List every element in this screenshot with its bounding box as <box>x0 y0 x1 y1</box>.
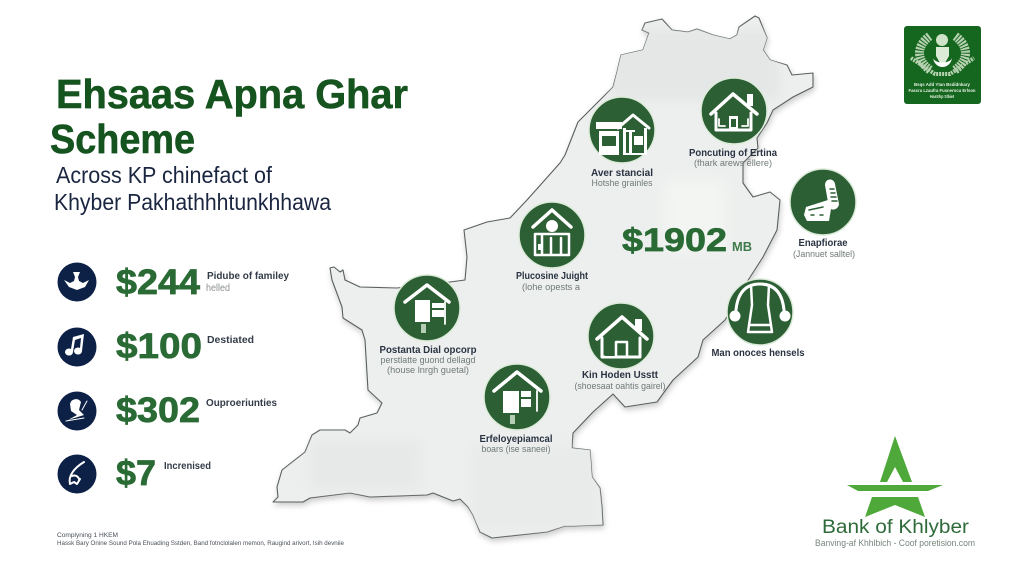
location: Aver stancial: Aver stancial <box>591 168 653 179</box>
stat: $302: $302 <box>116 391 200 430</box>
location: Postanta Dial opcorp: Postanta Dial opcorp <box>380 345 476 356</box>
location: Erfeloyepiamcal: Erfeloyepiamcal <box>480 434 553 445</box>
stat: $244 <box>58 262 289 302</box>
callout: $1902 MB <box>622 222 752 258</box>
location: Enapfiorae: Enapfiorae <box>798 238 848 249</box>
stat: $244: helled <box>206 283 230 294</box>
stat: $7: Increnised <box>164 461 211 472</box>
location: Man onoces hensels <box>712 279 805 359</box>
logo: emblem badge: Hastrhp Slbiet <box>930 94 954 99</box>
callout: $1902 MB: MB <box>732 239 752 254</box>
footnote: Hassk Bary Onine Sound Pola Ehuading Sstden, Band fotnclolalen memon, Raugind arivort, Isih devniie <box>57 540 344 547</box>
stat: $244: Pidube of familey <box>207 271 289 282</box>
location: Poncuting of Ertina <box>689 78 777 169</box>
title: Ehsaas Apna Ghar <box>56 71 408 117</box>
location: Kin Hoden Usstt <box>574 303 666 392</box>
stat: $302: Ouproeriunties <box>206 398 277 409</box>
subtitle: Across KP chinefact of <box>56 162 273 188</box>
title <box>50 71 408 162</box>
subtitle: Khyber Pakhathhhtunkhhawa <box>54 189 331 215</box>
location: Aver stancial: Hotshe grainles <box>592 178 653 189</box>
footnote <box>57 532 344 547</box>
stat: $302 <box>58 391 277 430</box>
stat: $7: $7 <box>116 454 156 493</box>
stat: $100: Destiated <box>207 335 254 346</box>
logo: emblem badge: Bsqs Add Ytan Bsdidnkary <box>914 82 970 87</box>
location: Postanta Dial opcorp: (house lnrgh guetal) <box>387 365 469 376</box>
callout: $1902 MB: $1902 <box>622 222 727 258</box>
logo: emblem badge: Fascra Lzaufra Fusnerncu Erlson <box>908 88 976 93</box>
stat: $100 <box>58 327 254 366</box>
stat: $244: $244 <box>116 263 201 302</box>
location: Poncuting of Ertina: (fhark arews ēllere) <box>694 158 772 169</box>
location: Enapfiorae: (Jannuet salltel) <box>793 249 855 260</box>
footnote: Complyning 1 HKEM <box>57 532 118 539</box>
logo: Bank of Khlyber: Banving-af Khhlbich - Coof poretision.com <box>815 538 975 549</box>
logo: Bank of Khlyber: Bank of Khlyber <box>822 517 970 538</box>
title: Scheme <box>50 116 195 162</box>
location: Erfeloyepiamcal <box>480 364 553 455</box>
location: Erfeloyepiamcal: boars (ise saneei) <box>482 444 550 455</box>
location: Postanta Dial opcorp: perstlatte guond dellagd <box>380 355 476 366</box>
stat: $7 <box>58 454 211 494</box>
location: Plucosine Juight: Plucosine Juight <box>516 271 589 282</box>
location: Kin Hoden Usstt: (shoesaat oahtis gairel) <box>574 381 666 392</box>
location: Enapfiorae <box>790 169 856 260</box>
location: Plucosine Juight <box>516 202 589 293</box>
location: Man onoces hensels: Man onoces hensels <box>712 348 805 359</box>
location: Postanta Dial opcorp <box>380 275 476 376</box>
logo: Bank of Khlyber <box>815 436 975 549</box>
location: Plucosine Juight: (lohe opests a <box>522 282 581 293</box>
location: Aver stancial <box>589 97 655 189</box>
map of region <box>273 16 813 538</box>
logo: emblem badge <box>904 26 981 104</box>
location: Kin Hoden Usstt: Kin Hoden Usstt <box>582 370 659 381</box>
subtitle <box>54 162 331 215</box>
location: Poncuting of Ertina: Poncuting of Ertina <box>689 148 777 159</box>
stat: $100: $100 <box>116 327 202 366</box>
